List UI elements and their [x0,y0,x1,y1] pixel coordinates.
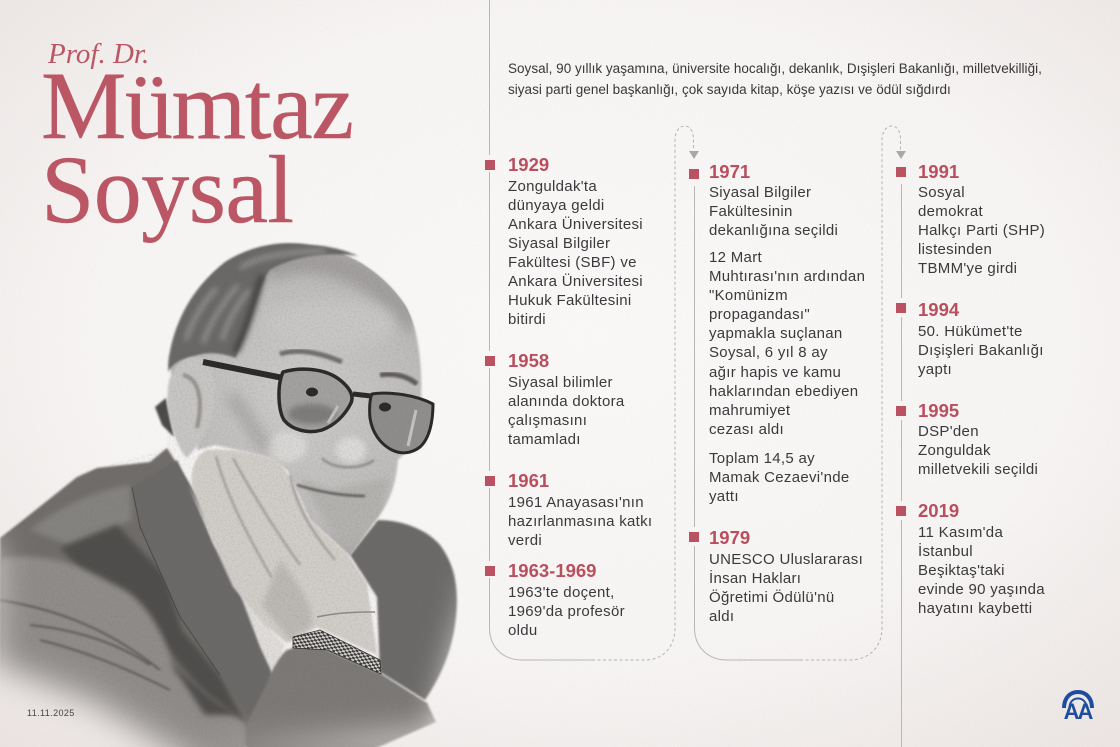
marker squares column 3 [896,167,906,516]
marker squares column 2 [689,169,699,542]
shirt [188,485,285,675]
entry: 1958: alanında doktora [508,393,625,410]
entry: 1979: aldı [709,608,734,625]
entry: 1994 [918,299,1044,378]
intro text: siyasi parti genel başkanlığı, çok sayıda kitap, köşe yazısı ve ödül sığdırdı [508,82,951,97]
entry: 1991 [918,161,1045,277]
entry: 1958: Siyasal bilimler [508,374,613,390]
entry: 1929: Ankara Üniversitesi [508,273,643,290]
entry: 1958: çalışmasını [508,412,587,429]
entry: 1994: 1994 [918,299,959,320]
entry: 1961: 1961 Anayasası'nın [508,494,644,510]
entry: 2019: evinde 90 yaşında [918,581,1045,598]
glasses [203,362,433,453]
entry: 1979: 1979 [709,527,750,548]
title: Mümtaz: Mümtaz [41,52,353,159]
marker squares column 1 [485,160,495,576]
entry: 1963-1969: oldu [508,622,538,639]
entry: 1971: Siyasal Bilgiler [709,184,811,201]
entry: 1971 [709,161,865,505]
entry: 1929: Zonguldak'ta [508,178,597,194]
entry: 1971: Mamak Cezaevi'nde [709,469,850,486]
entry: 1971: cezası aldı [709,421,784,438]
hair behind ear [155,398,174,437]
entry: 1963-1969: 1963'te doçent, [508,584,615,600]
entry: 1991: 1991 [918,161,959,182]
title: Soysal: Soysal [41,136,293,243]
wrist watch [293,630,381,674]
entry: 1979: İnsan Hakları [709,570,801,587]
entry: 1971: mahrumiyet [709,402,790,419]
entry: 1979: UNESCO Uluslararası [709,550,863,568]
entry: 2019: 2019 [918,500,959,521]
photo grain [24,256,456,708]
entry: 1929: 1929 [508,154,549,174]
entry: 1971: yapmakla suçlanan [709,325,843,342]
entry: 1929: bitirdi [508,311,546,328]
icon: AA logo [1062,690,1094,722]
entry: 1991: Sosyal [918,184,965,201]
arrow: to column 3 [896,151,906,159]
entry: 1991: Halkçı Parti (SHP) [918,222,1045,239]
entry: 1971: "Komünizm [709,287,788,304]
entry: 1971: Fakültesinin [709,203,793,220]
entry: 1958 [508,350,625,448]
left sleeve [0,556,247,747]
entry: 1995: 1995 [918,400,959,421]
entry: 1961: hazırlanmasına katkı [508,513,652,530]
entry: 1995: milletvekili seçildi [918,461,1038,478]
entry: 1958: tamamladı [508,431,581,448]
ear [166,356,198,458]
entry: 1929: Siyasal Bilgiler [508,235,610,252]
entry: 1963-1969: 1969'da profesör [508,603,625,620]
entry: 1971: Soysal, 6 yıl 8 ay [709,344,828,361]
entry: 2019: İstanbul [918,543,973,560]
entry: 1995: Zonguldak [918,442,991,459]
entry: 1971: 1971 [709,161,750,182]
entry: 1971: haklarından ebediyen [709,383,858,400]
entry: 1995: DSP'den [918,423,979,440]
entry: 2019 [918,500,1045,617]
entry: 1929: Fakültesi (SBF) ve [508,254,637,271]
arrow: to column 2 [689,151,699,159]
intro text: Soysal, 90 yıllık yaşamına, üniversite hocalığı, dekanlık, Dışişleri Bakanlığı, milletvekilliği, [508,61,1042,76]
hair [168,243,358,372]
timeline connector lines [490,0,902,747]
title: Prof. Dr.: Prof. Dr. [48,38,149,70]
entry: 1994: 50. Hükümet'te [918,323,1023,340]
entry: 1929: Ankara Üniversitesi [508,216,643,233]
entry: 2019: hayatını kaybetti [918,600,1032,617]
entry: 1929 [508,154,643,328]
entry: 1971: ağır hapis ve kamu [709,364,841,381]
entry: 1994: Dışişleri Bakanlığı [918,342,1044,359]
entry: 1963-1969: 1963-1969 [508,560,596,580]
entry: 1991: TBMM'ye girdi [918,260,1017,277]
sleeve over wrist [247,646,436,747]
entry: 1979 [709,527,863,625]
entry: 1971: Toplam 14,5 ay [709,450,815,467]
entry: 2019: 11 Kasım'da [918,524,1003,540]
date: 11.11.2025 [27,708,75,718]
entry: 1991: demokrat [918,203,983,220]
entry: 1971: propagandası" [709,306,810,323]
entry: 1958: 1958 [508,350,549,370]
hand [192,449,377,655]
entry: 1991: listesinden [918,241,992,258]
entry: 1963-1969 [508,560,625,639]
jacket right [350,520,457,700]
entry: 1979: Öğretimi Ödülü'nü [709,589,835,606]
head [168,244,421,556]
entry: 1961: 1961 [508,470,549,490]
jacket left shoulder [0,448,300,747]
entry: 1971: yattı [709,488,739,505]
entry: 1995 [918,400,1038,478]
entry: 1994: yaptı [918,361,952,378]
intro text [508,61,1042,97]
entry: 1971: Muhtırası'nın ardından [709,268,865,285]
entry: 2019: Beşiktaş'taki [918,562,1005,579]
entry: 1929: Hukuk Fakültesini [508,292,631,309]
entry: 1971: 12 Mart [709,249,762,266]
entry: 1961: verdi [508,532,542,549]
entry: 1971: dekanlığına seçildi [709,222,838,239]
entry: 1961 [508,470,652,549]
entry: 1929: dünyaya geldi [508,197,604,214]
